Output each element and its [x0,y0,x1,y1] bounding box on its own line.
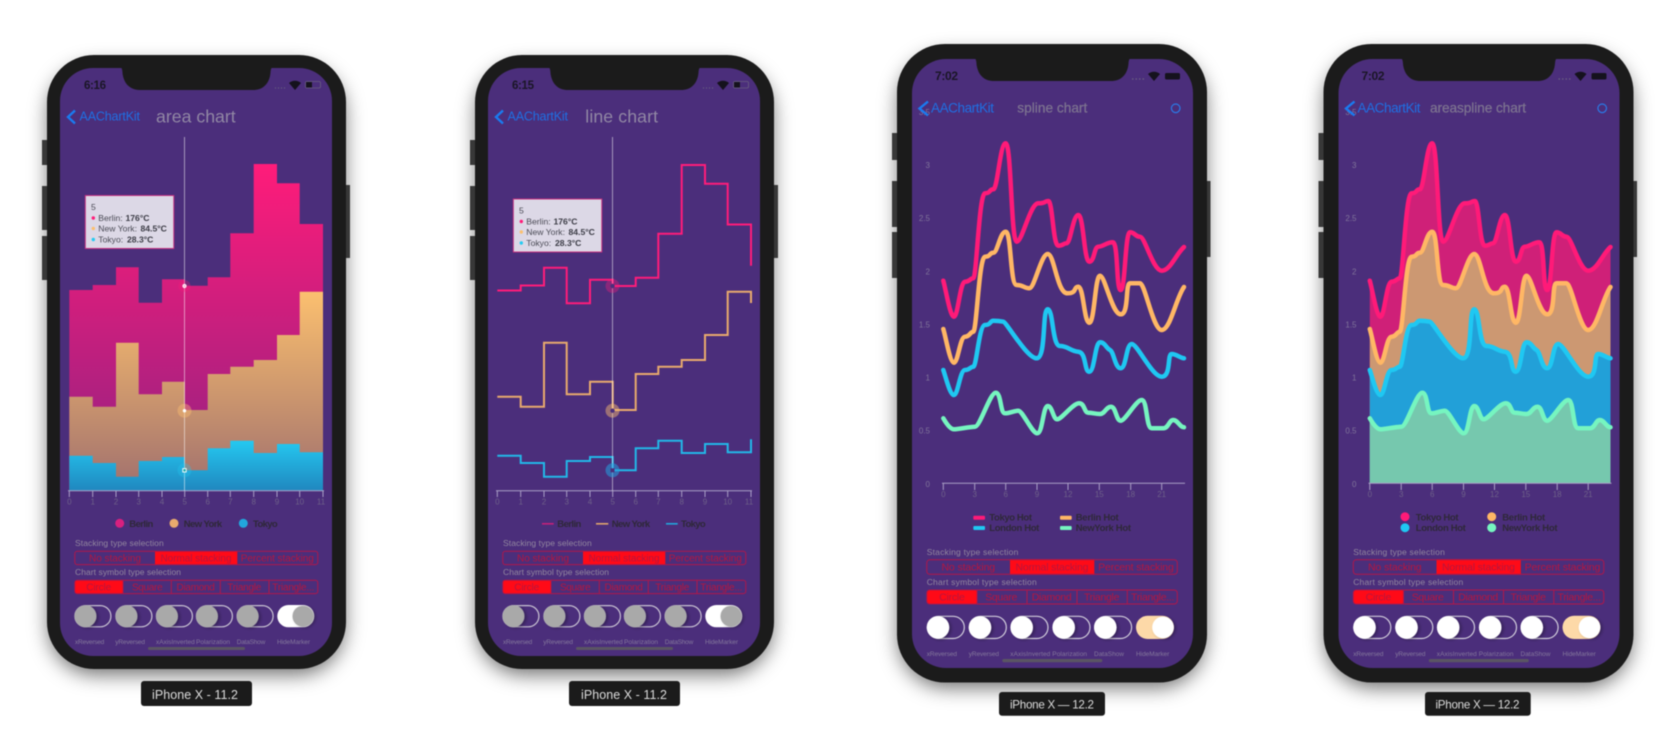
y axis labels: 1.5 [919,321,931,330]
chart symbol segmented control: Triangle... [700,582,742,594]
toggle labels: yReversed [543,639,573,646]
x axis labels: 10 [295,497,305,506]
legend: NewYork Hot [1502,523,1558,534]
chart symbol segmented control: Diamond [1458,592,1498,604]
line: NewYork Hot [1370,393,1610,433]
chart symbol segmented control [927,590,1177,604]
toggle labels [1353,651,1597,658]
tooltip [513,199,602,252]
y axis labels: 3 [926,161,931,170]
stacking type segmented control: Normal stacking [160,554,232,564]
chart symbol segmented control: Triangle [655,582,690,594]
home indicator [576,647,673,650]
chart symbol type label: Chart symbol type selection [1353,577,1463,587]
toggle switches [74,605,314,627]
x axis [942,483,1185,490]
step line chart [495,137,754,506]
area: Tokyo Hot [1370,143,1610,483]
toggle labels: xAxisInverted [1437,651,1477,658]
tooltip: 84.5°C [140,224,167,234]
tooltip: Tokyo: [98,234,123,244]
y axis labels: 2 [926,267,931,276]
stacking type segmented control: Normal stacking [588,554,660,564]
x axis labels: 0 [941,490,946,499]
stacking type segmented control: No stacking [517,554,569,564]
x axis labels: 15 [1521,490,1531,499]
area: London Hot [1370,309,1610,483]
legend: Tokyo [253,519,278,530]
stacking type segmented control: Normal stacking [1442,562,1515,574]
x axis labels: 0 [1368,490,1373,499]
nav back button: AAChartKit [508,110,569,124]
stacking type segmented control: No stacking [941,562,995,574]
legend: Tokyo Hot [1416,513,1459,524]
chart symbol segmented control: Square [132,582,163,594]
y axis labels: 2.5 [919,214,931,223]
x axis labels: 15 [1095,490,1104,499]
legend [973,513,1132,534]
chart symbol segmented control [74,580,318,594]
chart symbol segmented control: Triangle... [1131,592,1174,604]
x axis labels: 7 [228,497,233,506]
line: Tokyo [497,439,751,477]
x axis labels: 10 [723,497,733,506]
status bar time: 7:02 [935,69,958,83]
area: Berlin [69,164,323,491]
line: Tokyo Hot [943,143,1184,317]
x axis [1368,483,1612,490]
area: NewYork Hot [1370,393,1610,483]
tooltip: Berlin: [526,216,551,226]
tooltip: New York: [526,227,565,237]
chart symbol segmented control: Diamond [605,582,643,594]
chart symbol segmented control: Square [1412,592,1444,604]
chart symbol type label: Chart symbol type selection [75,567,181,577]
toggle labels [927,651,1170,658]
device body [47,55,346,669]
x axis labels: 9 [275,497,280,506]
stacking type segmented control: Percent stacking [241,554,314,564]
toggle labels: xAxisInverted [1010,651,1051,658]
y axis labels: 1 [1352,373,1357,382]
chart symbol segmented control: Diamond [177,582,215,594]
toggle labels: yReversed [1395,651,1426,658]
notch [1400,58,1558,81]
spline chart [941,143,1185,499]
toggle labels: DataShow [1520,651,1551,658]
chart symbol segmented control: Triangle [227,582,262,594]
device badge: iPhone X - 11.2 [152,688,238,702]
toggle labels [503,639,739,646]
toggle labels: xReversed [927,651,957,658]
toggle labels: yReversed [115,639,145,646]
legend: Berlin Hot [1076,513,1120,524]
x axis labels: 8 [679,497,684,506]
legend [1400,512,1558,534]
y axis labels: 2 [1352,267,1357,276]
stacking type segmented control: No stacking [1368,562,1422,574]
crosshair and markers [606,137,620,491]
toggle labels: xAxisInverted [156,639,195,646]
legend: NewYork Hot [1076,523,1132,534]
x axis labels: 3 [564,497,569,506]
x axis labels: 9 [1461,490,1466,499]
x axis labels [495,497,754,506]
chart symbol type label: Chart symbol type selection [927,577,1037,587]
chart symbol segmented control: Triangle... [272,582,314,594]
home indicator [148,647,245,650]
x axis labels: 11 [745,497,754,506]
x axis labels: 2 [114,497,119,506]
x axis [496,491,752,497]
toggle labels: yReversed [969,651,999,658]
line: Berlin Hot [1370,232,1610,363]
legend: London Hot [989,523,1040,534]
x axis labels: 12 [1490,490,1499,499]
chart title: area chart [156,107,236,127]
nav back button: AAChartKit [1358,101,1421,116]
toggle labels: Polarization [196,639,230,646]
chart symbol type label: Chart symbol type selection [503,567,609,577]
stacked step area chart [67,137,326,506]
status bar icons [703,81,748,90]
x axis labels: 0 [67,497,72,506]
toggle labels: HideMarker [1562,651,1597,658]
stacking type label: Stacking type selection [75,538,164,548]
x axis labels: 21 [1157,490,1167,499]
y axis labels: 3 [1352,161,1357,170]
screen [60,68,332,656]
legend [115,519,278,530]
legend: Berlin Hot [1502,513,1546,524]
phone: spline chart [892,44,1210,687]
toggle labels: DataShow [1094,651,1124,658]
x axis labels: 2 [542,497,547,506]
y axis labels: 0.5 [919,427,931,436]
areaspline chart [1368,143,1612,499]
notch [120,67,273,90]
chart title: areaspline chart [1430,101,1526,116]
device badge [569,681,680,706]
toggle switches [927,616,1174,639]
line: New York [497,292,751,410]
chart symbol segmented control: Circle [86,582,112,594]
toggle switches [502,605,742,627]
x axis labels: 12 [1064,490,1073,499]
tooltip: Berlin: [98,213,123,223]
home indicator [1429,659,1529,662]
y axis labels [919,108,931,489]
legend: Tokyo [681,519,706,530]
chart symbol segmented control: Triangle [1510,592,1546,604]
y axis labels: 0.5 [1345,427,1357,436]
tooltip: New York: [98,224,137,234]
line: London Hot [943,309,1184,395]
tooltip: 176°C [554,216,577,226]
device body [1324,44,1634,682]
x axis labels [941,490,1167,499]
stacking type label: Stacking type selection [927,547,1019,557]
legend: Berlin [129,519,153,530]
screen [912,59,1193,668]
side buttons [1318,133,1637,278]
status bar time: 7:02 [1362,69,1385,83]
x axis labels: 6 [1430,490,1435,499]
nav back button: AAChartKit [80,110,141,124]
tooltip: 5 [519,206,524,216]
x axis labels: 6 [633,497,638,506]
chart symbol segmented control: Circle [939,592,965,604]
toggle labels: xReversed [1353,651,1384,658]
y axis labels: 0 [1352,480,1357,489]
x axis labels: 0 [495,497,500,506]
toggle labels: DataShow [665,639,694,646]
refresh indicator [1171,104,1180,113]
chart symbol segmented control: Triangle... [1557,592,1601,604]
screen [488,68,760,656]
device badge [1425,692,1531,716]
tooltip [85,196,174,248]
stacking type segmented control: Percent stacking [1098,562,1174,574]
stacking type segmented control: Percent stacking [669,554,742,564]
toggle labels: xReversed [503,639,533,646]
stacking type segmented control [75,551,318,565]
side buttons [470,140,778,280]
home indicator [1002,659,1102,662]
line: Tokyo Hot [1370,143,1610,317]
x axis labels: 8 [251,497,256,506]
toggle labels [75,639,311,646]
chart symbol segmented control [1353,590,1604,604]
stacking type label: Stacking type selection [503,538,592,548]
x axis labels: 5 [182,497,187,506]
tooltip: 28.3°C [127,234,153,244]
x axis labels: 9 [1035,490,1040,499]
toggle labels: Polarization [1052,651,1087,658]
legend: Tokyo Hot [989,513,1033,524]
x axis labels: 4 [160,497,165,506]
device badge: iPhone X - 11.2 [581,688,667,702]
area: New York [69,292,323,491]
x axis labels: 9 [703,497,708,506]
x axis labels: 3 [136,497,141,506]
phone: line chart [470,55,778,674]
chart symbol segmented control: Diamond [1032,592,1072,604]
status bar icons [1558,72,1606,81]
x axis labels [1368,490,1593,499]
stacking type label: Stacking type selection [1353,547,1445,557]
chart symbol segmented control [502,580,746,594]
notch [548,67,701,90]
stacking type segmented control [503,551,746,565]
area: Tokyo [69,439,323,491]
device badge: iPhone X — 12.2 [1436,699,1520,712]
y axis labels: 3.5 [919,108,931,117]
x axis labels: 11 [317,497,326,506]
y axis labels: 1 [926,373,931,382]
toggle labels: DataShow [237,639,266,646]
legend: Berlin [557,519,581,530]
phone: area chart [42,55,350,674]
chart symbol segmented control: Square [985,592,1017,604]
x axis [68,491,324,497]
tooltip: Tokyo: [526,238,551,248]
y axis labels: 2.5 [1345,214,1357,223]
stacking type segmented control [1353,559,1604,575]
legend: London Hot [1416,523,1467,534]
tooltip: 5 [91,202,96,212]
toggle labels: xReversed [75,639,105,646]
x axis labels: 21 [1584,490,1593,499]
x axis labels: 1 [90,497,95,506]
device badge: iPhone X — 12.2 [1010,699,1094,712]
side buttons [892,133,1210,278]
stacking type segmented control [927,559,1177,575]
stacking type segmented control: Normal stacking [1016,562,1089,574]
tooltip: 84.5°C [568,227,595,237]
y axis labels: 3.5 [1345,108,1357,117]
toggle switches [1353,616,1600,639]
toggle labels: Polarization [624,639,658,646]
legend: New York [612,519,651,530]
chart title: spline chart [1017,101,1087,116]
status bar icons [1132,72,1180,81]
x axis labels [67,497,326,506]
status bar time: 6:15 [512,80,535,92]
x axis labels: 6 [1003,490,1008,499]
x axis labels: 4 [588,497,593,506]
chart symbol segmented control: Circle [514,582,540,594]
y axis labels: 1.5 [1345,321,1357,330]
device body [897,44,1207,682]
tooltip: 28.3°C [555,238,581,248]
x axis labels: 6 [205,497,210,506]
line: Berlin Hot [943,232,1184,363]
crosshair and markers [178,137,192,491]
x axis labels: 7 [656,497,661,506]
y axis labels [1345,108,1357,489]
toggle labels: HideMarker [705,639,739,646]
legend [542,519,706,530]
area: Berlin Hot [1370,232,1610,483]
tooltip: 176°C [126,213,149,223]
side buttons [42,140,350,280]
stacking type segmented control: Percent stacking [1525,562,1601,574]
phone: areaspline chart [1318,44,1637,687]
toggle labels: xAxisInverted [584,639,623,646]
x axis labels: 18 [1126,490,1136,499]
x axis labels: 18 [1553,490,1562,499]
device badge [141,681,252,706]
legend: New York [184,519,223,530]
x axis labels: 3 [972,490,977,499]
toggle labels: Polarization [1479,651,1514,658]
chart symbol segmented control: Square [560,582,591,594]
device body [475,55,774,669]
stacking type segmented control: No stacking [89,554,141,564]
x axis labels: 1 [518,497,523,506]
status bar icons [275,81,320,90]
x axis labels: 5 [610,497,615,506]
screen [1338,59,1620,668]
nav back button: AAChartKit [931,101,994,116]
refresh indicator [1598,104,1606,113]
notch [974,58,1131,81]
status bar time: 6:16 [84,80,106,92]
chart symbol segmented control: Triangle [1084,592,1120,604]
device badge [999,692,1105,716]
toggle labels: HideMarker [1136,651,1170,658]
line: Berlin [497,165,751,303]
x axis labels: 3 [1399,490,1404,499]
line: London Hot [1370,309,1610,395]
chart title: line chart [585,107,658,127]
y axis labels: 0 [926,480,931,489]
chart symbol segmented control: Circle [1366,592,1392,604]
toggle labels: HideMarker [277,639,311,646]
line: NewYork Hot [943,393,1184,433]
